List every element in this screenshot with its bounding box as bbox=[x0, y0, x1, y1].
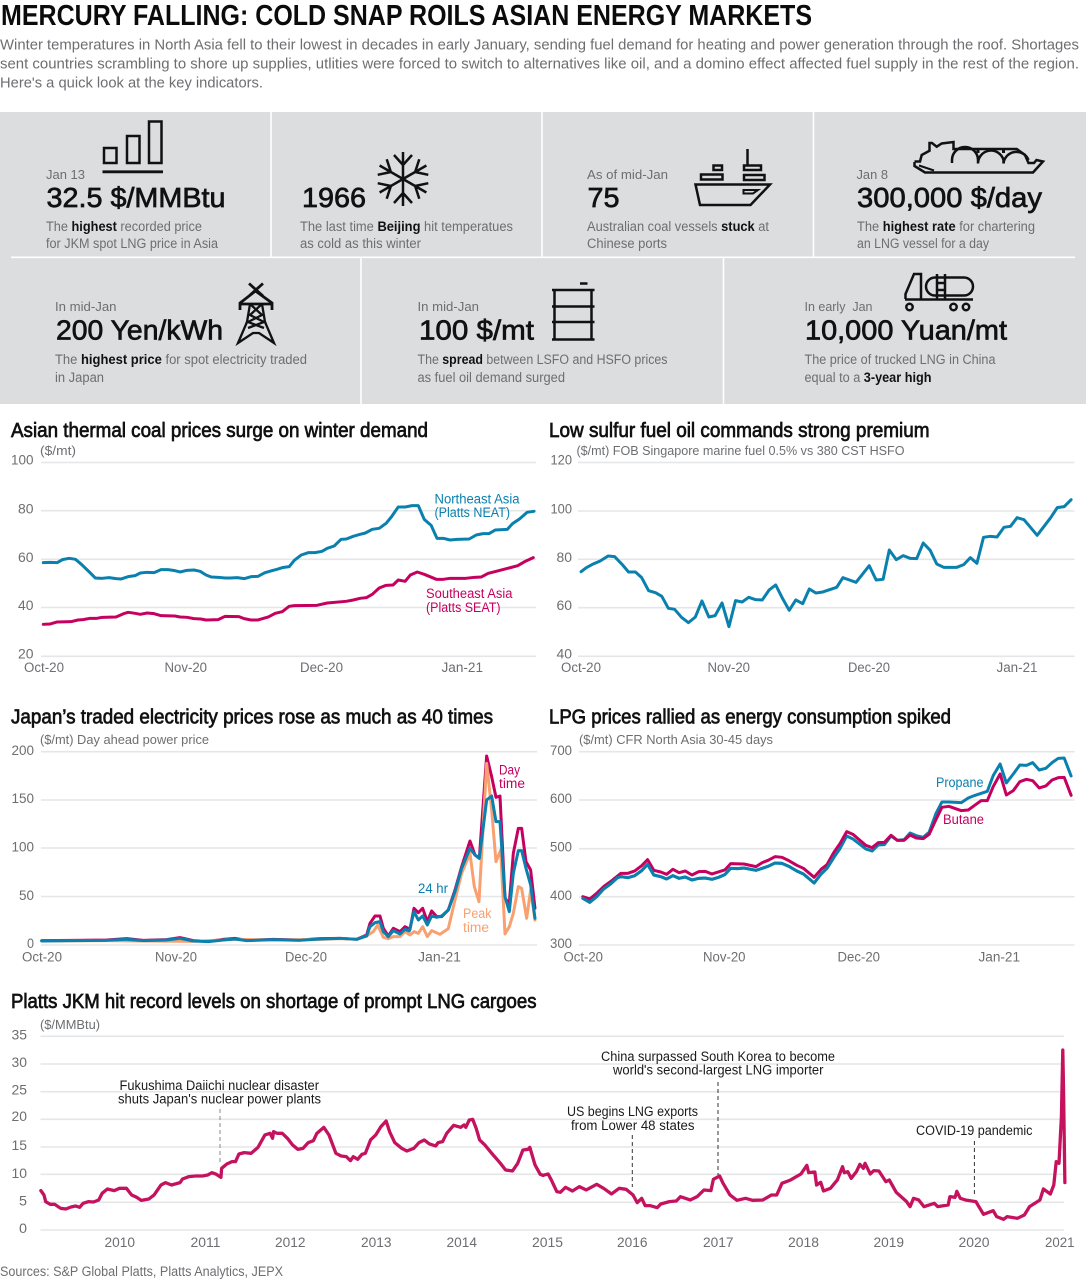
label: day time: Day bbox=[499, 762, 520, 778]
x axis: Jan-21 bbox=[442, 660, 483, 675]
stat: Beijing cold bbox=[300, 152, 513, 251]
x axis bbox=[22, 950, 461, 964]
chart: LPG prices bbox=[549, 706, 1074, 964]
label: butane: Butane bbox=[943, 812, 984, 827]
stat: trucked LNG: The price of trucked LNG in China bbox=[804, 352, 996, 367]
x axis years: 2017 bbox=[703, 1235, 734, 1250]
line: Southeast Asia bbox=[43, 558, 533, 624]
annotation: US LNG exports bbox=[567, 1104, 698, 1187]
panel: key indicators bbox=[0, 112, 1086, 404]
icon: LNG tanker bbox=[914, 142, 1043, 172]
chart unit: ($/mt) bbox=[40, 443, 76, 458]
y axis bbox=[550, 452, 572, 662]
stat: trucked LNG: In early Jan bbox=[804, 299, 872, 314]
chart heading: Japan’s traded electricity prices rose as much as 40 times bbox=[11, 706, 493, 728]
x axis years: 2011 bbox=[190, 1235, 220, 1250]
annotation: COVID-19 bbox=[916, 1123, 1033, 1197]
label: Northeast Asia: Northeast Asia bbox=[434, 492, 520, 506]
stat: Japan power price bbox=[55, 284, 307, 385]
stat: JKM price: 32.5 $/MMBtu bbox=[46, 182, 226, 213]
y axis: 5 bbox=[19, 1194, 27, 1208]
annotation: Fukushima: shuts Japan's nuclear power plants bbox=[118, 1092, 321, 1106]
stat: LSFO HSFO spread bbox=[418, 284, 668, 385]
x axis: Dec-20 bbox=[838, 950, 880, 964]
stat: Japan power price: in Japan bbox=[55, 370, 104, 385]
x axis: Jan-21 bbox=[996, 660, 1038, 675]
x axis: Nov-20 bbox=[155, 950, 197, 964]
y axis bbox=[12, 743, 34, 951]
stat: LSFO HSFO spread: 100 $/mt bbox=[419, 314, 534, 346]
y axis: 120 bbox=[550, 452, 572, 468]
line: LSFO premium bbox=[581, 500, 1071, 627]
title: MERCURY FALLING: COLD SNAP ROILS ASIAN ENERGY MARKETS bbox=[1, 0, 812, 32]
annotation: US LNG exports: US begins LNG exports bbox=[567, 1104, 698, 1119]
chart unit: ($/mt) Day ahead power price bbox=[40, 732, 209, 747]
stat: JKM price bbox=[46, 122, 226, 251]
chart heading: Platts JKM hit record levels on shortage of prompt LNG cargoes bbox=[11, 991, 536, 1013]
x axis: Jan-21 bbox=[978, 950, 1020, 964]
stat: coal vessels: Chinese ports bbox=[587, 236, 667, 251]
label: propane: Propane bbox=[936, 775, 984, 790]
stat: JKM price: for JKM spot LNG price in Asia bbox=[46, 236, 218, 251]
chart unit: ($/mt) FOB Singapore marine fuel 0.5% vs 380 CST HSFO bbox=[576, 443, 904, 458]
x axis years: 2015 bbox=[532, 1235, 563, 1250]
stat: LNG charter rate: The highest rate for chartering bbox=[857, 219, 1035, 234]
stat: LSFO HSFO spread: as fuel oil demand surged bbox=[418, 370, 565, 385]
chart: Asian thermal coal bbox=[11, 420, 536, 675]
chart heading: Low sulfur fuel oil commands strong premium bbox=[549, 420, 930, 442]
icon: bar chart bbox=[102, 122, 163, 172]
y axis: 100 bbox=[12, 840, 34, 854]
stat: coal vessels: 75 bbox=[588, 182, 620, 213]
x axis years: 2012 bbox=[275, 1235, 306, 1250]
annotation: China LNG importer: world's second-largest LNG importer bbox=[612, 1062, 824, 1078]
y axis: 15 bbox=[12, 1138, 27, 1153]
annotation: Fukushima: Fukushima Daiichi nuclear disaster bbox=[120, 1078, 319, 1093]
annotation: China LNG importer: China surpassed South Korea to become bbox=[601, 1049, 835, 1064]
stat: JKM price: The highest recorded price bbox=[46, 219, 202, 234]
y axis: 0 bbox=[27, 936, 34, 951]
y axis: 10 bbox=[12, 1166, 27, 1181]
x axis years: 2020 bbox=[958, 1235, 990, 1250]
stat: JKM price: Jan 13 bbox=[46, 167, 85, 182]
y axis: 25 bbox=[12, 1082, 27, 1098]
x axis: Dec-20 bbox=[300, 660, 343, 675]
y axis: 0 bbox=[19, 1221, 27, 1236]
label: peak time bbox=[463, 906, 492, 935]
x axis: Oct-20 bbox=[24, 660, 64, 675]
x axis years: 2019 bbox=[874, 1235, 904, 1250]
intro text: Winter temperatures in North Asia fell to their lowest in decades in early January, sending fuel demand for heating and power generation through the roof. Shortages bbox=[0, 38, 1079, 54]
label: peak time: time bbox=[463, 920, 489, 935]
y axis bbox=[550, 743, 572, 951]
stat: LSFO HSFO spread: In mid-Jan bbox=[418, 299, 479, 314]
label: day time bbox=[499, 762, 525, 791]
label: 24 hr: 24 hr bbox=[418, 881, 448, 896]
annotation: US LNG exports: from Lower 48 states bbox=[571, 1118, 695, 1133]
line: peak time bbox=[42, 763, 535, 941]
x axis: Oct-20 bbox=[22, 950, 62, 964]
x axis years: 2021 bbox=[1045, 1235, 1074, 1250]
y axis: 40 bbox=[556, 646, 572, 662]
icon: tanker truck bbox=[905, 274, 973, 310]
x axis years: 2014 bbox=[446, 1235, 477, 1250]
label: day time: time bbox=[499, 776, 525, 791]
label: Northeast Asia bbox=[434, 492, 520, 520]
y axis: 100 bbox=[550, 502, 572, 516]
line: butane bbox=[583, 774, 1071, 899]
chart heading: Asian thermal coal prices surge on winter demand bbox=[11, 420, 428, 442]
x axis: Nov-20 bbox=[708, 660, 750, 675]
x axis: Dec-20 bbox=[285, 950, 327, 964]
y axis: 30 bbox=[12, 1055, 27, 1070]
line: Northeast Asia bbox=[43, 506, 534, 579]
y axis: 100 bbox=[11, 452, 34, 468]
intro text: Here's a quick look at the key indicators. bbox=[0, 76, 263, 92]
icon: cargo ship bbox=[696, 149, 770, 205]
chart unit: ($/mt) CFR North Asia 30-45 days bbox=[579, 732, 773, 747]
annotation: COVID-19: COVID-19 pandemic bbox=[916, 1123, 1033, 1138]
chart unit: ($/MMBtu) bbox=[40, 1017, 100, 1032]
y axis: 60 bbox=[556, 598, 572, 613]
chart: low sulfur fuel oil bbox=[549, 420, 1074, 675]
y axis: 60 bbox=[18, 550, 34, 565]
chart: Japan electricity prices bbox=[11, 706, 537, 964]
y axis: 20 bbox=[18, 646, 34, 662]
stat: Beijing cold: 1966 bbox=[302, 182, 366, 213]
y axis: 300 bbox=[550, 936, 572, 951]
icon: snowflake bbox=[375, 152, 431, 206]
stat: LNG charter rate: 300,000 $/day bbox=[857, 182, 1042, 213]
stat: LNG charter rate: Jan 8 bbox=[856, 167, 888, 182]
y axis: 80 bbox=[18, 502, 34, 516]
x axis: Nov-20 bbox=[703, 950, 746, 964]
y axis: 700 bbox=[550, 743, 572, 758]
x axis years: 2016 bbox=[617, 1235, 648, 1250]
x axis: Jan-21 bbox=[418, 950, 461, 964]
y axis: 50 bbox=[19, 888, 34, 903]
y axis: 200 bbox=[12, 743, 34, 758]
stat: Japan power price: In mid-Jan bbox=[55, 299, 116, 314]
x axis years: 2013 bbox=[361, 1235, 392, 1250]
stat: trucked LNG: equal to a 3-year high bbox=[804, 370, 932, 385]
sources footer: Sources: S&P Global Platts, Platts Analytics, JEPX bbox=[0, 1264, 283, 1279]
stat: LNG charter rate bbox=[856, 142, 1043, 251]
x axis bbox=[24, 660, 483, 675]
icon: oil drum bbox=[552, 284, 594, 340]
stat: coal vessels bbox=[587, 149, 770, 251]
x axis years: 2018 bbox=[788, 1235, 819, 1250]
stat: Beijing cold: The last time Beijing hit temperatues bbox=[300, 219, 513, 234]
stat: Beijing cold: as cold as this winter bbox=[300, 236, 421, 251]
label: Southeast Asia bbox=[426, 586, 513, 615]
stat: coal vessels: As of mid-Jan bbox=[587, 167, 668, 182]
stat: trucked LNG: 10,000 Yuan/mt bbox=[805, 314, 1007, 346]
y axis: 20 bbox=[12, 1109, 27, 1124]
intro text bbox=[0, 38, 1079, 92]
line: 24 hr bbox=[42, 796, 535, 942]
stat: LNG charter rate: an LNG vessel for a day bbox=[857, 236, 989, 251]
x axis years bbox=[104, 1235, 1074, 1250]
line: day time bbox=[42, 756, 535, 941]
x axis: Nov-20 bbox=[164, 660, 207, 675]
chart heading: LPG prices rallied as energy consumption spiked bbox=[549, 706, 951, 728]
label: peak time: Peak bbox=[463, 906, 492, 921]
stat: Japan power price: The highest price for spot electricity traded bbox=[55, 352, 307, 367]
annotation: Fukushima bbox=[118, 1078, 321, 1163]
line: JKM price bbox=[41, 1050, 1065, 1219]
y axis: 400 bbox=[550, 888, 572, 903]
stat: Japan power price: 200 Yen/kWh bbox=[56, 314, 223, 346]
stat: coal vessels: Australian coal vessels stuck at bbox=[587, 219, 769, 234]
y axis: 500 bbox=[550, 840, 572, 854]
line: propane bbox=[583, 758, 1071, 902]
x axis years: 2010 bbox=[104, 1235, 135, 1250]
stat: trucked LNG bbox=[804, 274, 1007, 385]
y axis: 40 bbox=[18, 598, 34, 613]
stat: LSFO HSFO spread: The spread between LSFO and HSFO prices bbox=[418, 352, 668, 367]
x axis: Oct-20 bbox=[561, 660, 601, 675]
intro text: sent countries scrambling to shore up supplies, utlities were forced to switch to alternatives like oil, and a domino effect affected fuel supply in the rest of the region. bbox=[0, 56, 1079, 72]
annotation: China LNG importer bbox=[601, 1049, 835, 1175]
x axis bbox=[564, 950, 1020, 964]
x axis: Oct-20 bbox=[564, 950, 603, 964]
x axis: Dec-20 bbox=[848, 660, 890, 675]
icon: power pylon bbox=[238, 284, 274, 343]
y axis bbox=[12, 1028, 27, 1236]
label: Southeast Asia: Southeast Asia bbox=[426, 586, 513, 601]
y axis: 150 bbox=[12, 791, 34, 806]
y axis: 80 bbox=[556, 550, 572, 565]
chart: Platts JKM history bbox=[11, 991, 1074, 1250]
line: propane overlay, early section bbox=[583, 848, 840, 902]
y axis: 600 bbox=[550, 791, 572, 806]
label: Southeast Asia: (Platts SEAT) bbox=[426, 600, 500, 615]
label: Northeast Asia: (Platts NEAT) bbox=[434, 505, 510, 520]
y axis: 35 bbox=[12, 1028, 27, 1042]
x axis bbox=[561, 660, 1038, 675]
y axis bbox=[11, 452, 34, 662]
